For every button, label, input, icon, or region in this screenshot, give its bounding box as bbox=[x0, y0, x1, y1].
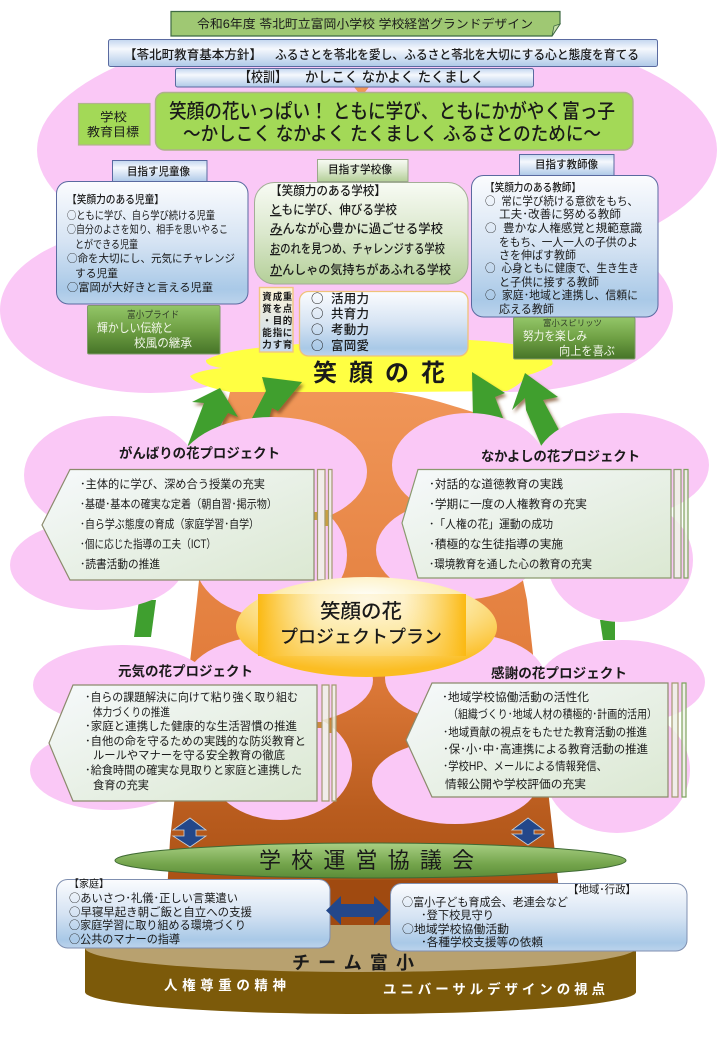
tab: ideal school bbox=[318, 160, 408, 182]
panel: ideal pupil: する児童 bbox=[75, 267, 118, 280]
petals: がんばり flower bbox=[10, 416, 367, 617]
label: key competencies: 質 bbox=[262, 303, 272, 315]
yellow flower: smile flower bbox=[190, 340, 553, 392]
panel: home: 【家庭】 bbox=[69, 877, 109, 890]
project box: genki: ･自らの課題解決に向けて粘り強く取り組む bbox=[85, 690, 298, 704]
panel: ideal teacher: をもち、一人一人の子供のよ bbox=[499, 235, 638, 249]
panel: Tomioka spirit bbox=[514, 318, 635, 359]
panel: community and administration: ･各種学校支援等の依頼 bbox=[421, 935, 544, 949]
project box: kansha: ･地域学校協働活動の活性化 bbox=[442, 690, 590, 704]
project box: ganbari: ･主体的に学び、深め合う授業の充実 bbox=[80, 477, 265, 491]
panel: ideal school bbox=[254, 182, 468, 284]
project box: nakayoshi: ･学期に一度の人権教育の充実 bbox=[429, 497, 587, 511]
panel: competencies list bbox=[300, 288, 468, 356]
school motto bar: 【校訓】 bbox=[239, 69, 287, 85]
school goal label bbox=[78, 104, 150, 145]
panel: ideal pupil: 【笑顔力のある児童】 bbox=[67, 192, 164, 206]
school goal main box: ～かしこく なかよく たくましく ふるさとのために～ bbox=[183, 123, 601, 145]
project box: ganbari bbox=[42, 470, 332, 580]
title banner bbox=[171, 12, 560, 36]
panel: ideal pupil bbox=[56, 182, 248, 304]
panel: Tomioka spirit: 努力を楽しみ bbox=[523, 328, 587, 343]
panel: ideal pupil: ○自分のよさを知り、相手を思いやるこ bbox=[67, 221, 228, 237]
panel: Tomioka pride: 富小プライド bbox=[127, 309, 179, 321]
project box: kansha bbox=[406, 683, 686, 797]
panel: community and administration: ○地域学校協働活動 bbox=[402, 921, 509, 937]
heading: smile flower: 笑 顔 の 花 bbox=[313, 360, 445, 387]
flower crown: pink petals bbox=[0, 20, 717, 393]
centre plan ellipse: 笑顔の花 bbox=[320, 600, 402, 623]
panel: ideal school: おのれを見つめ、チャレンジする学校 bbox=[270, 241, 445, 256]
project box: genki: 食育の充実 bbox=[93, 779, 149, 792]
panel: ideal teacher: ○ 家庭･地域と連携し、信頼に bbox=[485, 287, 638, 303]
panel: ideal school: ともに学び、伸びる学校 bbox=[270, 202, 397, 217]
panel: ideal pupil: ○命を大切にし、元気にチャレンジ bbox=[67, 250, 235, 266]
label: key competencies: す bbox=[273, 340, 282, 351]
lower green arrow stems bbox=[134, 600, 615, 640]
centre plan ellipse: プロジェクトプラン bbox=[280, 627, 442, 647]
project box: kansha: （組織づくり･地域人材の積極的･計画的活用） bbox=[448, 707, 657, 721]
panel: Tomioka spirit: 向上を喜ぶ bbox=[559, 343, 615, 358]
panel: ideal teacher: と子供に接する教師 bbox=[499, 275, 599, 289]
green arrows rising to the flower bbox=[186, 372, 559, 450]
project box: genki: ･自他の命を守るための実践的な防災教育と bbox=[85, 734, 306, 748]
panel: Tomioka pride: 校風の継承 bbox=[134, 336, 192, 350]
town education policy bar bbox=[108, 40, 658, 66]
panel: ideal teacher bbox=[472, 176, 658, 317]
tree trunk bbox=[165, 392, 560, 930]
panel: ideal teacher: 工夫･改善に努める教師 bbox=[499, 207, 621, 221]
panel: competencies list: ○ bbox=[311, 303, 324, 322]
project box: kansha: ･保･小･中･高連携による教育活動の推進 bbox=[443, 742, 648, 756]
team base cylinder bbox=[85, 924, 636, 1014]
heading: ganbari project: がんばりの花プロジェクト bbox=[119, 445, 280, 461]
panel: ideal school: かんしゃの気持ちがあふれる学校 bbox=[270, 262, 451, 277]
tab: ideal teacher bbox=[520, 154, 614, 176]
label: key competencies: を bbox=[273, 304, 282, 315]
project box: ganbari: ･読書活動の推進 bbox=[80, 557, 160, 571]
tab: ideal pupil bbox=[112, 160, 207, 182]
project box: genki: ･家庭と連携した健康的な生活習慣の推進 bbox=[85, 719, 297, 733]
project box: genki bbox=[49, 685, 336, 801]
town education policy bar: 【苓北町教育基本方針】 bbox=[124, 47, 262, 62]
panel: ideal teacher: ○ 常に学び続ける意欲をもち、 bbox=[485, 193, 638, 209]
panel: Tomioka spirit: 富小スピリッツ bbox=[543, 318, 602, 328]
arrow: horizontal double bbox=[326, 896, 389, 925]
tab: ideal school: 目指す学校像 bbox=[328, 162, 392, 176]
panel: competencies list: 共育力 bbox=[331, 306, 369, 321]
project box: genki: 体力づくりの推進 bbox=[93, 705, 170, 719]
arrow: left vertical double bbox=[173, 818, 206, 847]
tab: ideal teacher: 目指す教師像 bbox=[535, 157, 598, 171]
school motto bar bbox=[176, 68, 534, 87]
heading: nakayoshi project: なかよしの花プロジェクト bbox=[481, 449, 640, 464]
title banner: 令和6年度 苓北町立富岡小学校 学校経営グランドデザイン bbox=[197, 16, 533, 31]
label: key competencies: 重 bbox=[283, 291, 293, 303]
panel: competencies list: ○ bbox=[311, 288, 324, 307]
project box: ganbari: ･個に応じた指導の工夫（ICT） bbox=[80, 537, 216, 551]
panel: community and administration: ･登下校見守り bbox=[421, 908, 494, 922]
petals: 感謝 flower bbox=[372, 634, 705, 833]
panel: home: ○早寝早起き朝ご飯と自立への支援 bbox=[69, 904, 252, 920]
label: key competencies: ・ bbox=[262, 316, 272, 327]
label: key competencies bbox=[260, 288, 293, 352]
tab: ideal pupil: 目指す児童像 bbox=[127, 164, 190, 178]
label: key competencies: 指 bbox=[273, 327, 283, 339]
school council oval: 学校運営協議会 bbox=[259, 848, 474, 873]
panel: ideal school: 【笑顔力のある学校】 bbox=[270, 183, 386, 198]
school goal label: 学校 bbox=[100, 109, 127, 124]
project box: ganbari: ･自ら学ぶ態度の育成（家庭学習･自学） bbox=[80, 517, 259, 531]
heading: kansha project: 感謝の花プロジェクト bbox=[491, 665, 627, 681]
panel: home: ○公共のマナーの指導 bbox=[69, 931, 180, 947]
school goal main box bbox=[156, 92, 633, 150]
school council oval bbox=[115, 843, 626, 878]
base text: universal design: ユニバーサルデザインの視点 bbox=[383, 981, 606, 997]
panel: Tomioka pride bbox=[88, 306, 220, 354]
trunk tip under motto bbox=[354, 87, 369, 92]
project box: nakayoshi: ･対話的な道徳教育の実践 bbox=[429, 477, 564, 491]
petals: 元気 flower bbox=[30, 635, 373, 820]
project box: kansha: ･学校HP、メールによる情報発信、 bbox=[443, 759, 607, 773]
project box: nakayoshi bbox=[402, 470, 688, 578]
school goal label: 教育目標 bbox=[87, 124, 139, 139]
panel: ideal school: みんなが心豊かに過ごせる学校 bbox=[270, 221, 443, 236]
panel: ideal pupil: ○ともに学び、自ら学び続ける児童 bbox=[67, 207, 215, 223]
label: key competencies: 力 bbox=[262, 339, 272, 351]
team heading: チーム富小 bbox=[292, 953, 414, 973]
base text: human rights: 人権尊重の精神 bbox=[164, 977, 286, 993]
panel: competencies list: 活用力 bbox=[331, 292, 369, 306]
panel: competencies list: 富岡愛 bbox=[331, 339, 369, 353]
label: key competencies: 成 bbox=[273, 291, 283, 303]
school motto bar: かしこく なかよく たくましく bbox=[305, 69, 484, 85]
label: key competencies: 資 bbox=[262, 291, 272, 303]
panel: competencies list: ○ bbox=[311, 335, 324, 354]
label: key competencies: 育 bbox=[283, 339, 292, 351]
centre plan ellipse bbox=[236, 577, 497, 677]
town education policy bar: ふるさとを苓北を愛し、ふるさと苓北を大切にする心と態度を育てる bbox=[275, 47, 639, 62]
panel: ideal pupil: とができる児童 bbox=[75, 237, 138, 251]
project box: genki: ルールやマナーを守る安全教育の徹底 bbox=[93, 748, 285, 762]
label: key competencies: に bbox=[283, 328, 292, 339]
panel: competencies list: 考動力 bbox=[331, 322, 369, 337]
school goal main box: 笑顔の花いっぱい！ ともに学び、ともにかがやく富っ子 bbox=[169, 100, 615, 123]
panel: community and administration bbox=[390, 882, 687, 951]
label: key competencies: 的 bbox=[283, 315, 292, 327]
panel: ideal teacher: 【笑顔力のある教師】 bbox=[485, 180, 581, 194]
panel: ideal teacher: ○ 心身ともに健康で、生き生き bbox=[485, 260, 639, 276]
panel: ideal teacher: ○ 豊かな人権感覚と規範意識 bbox=[485, 220, 643, 236]
panel: home: ○あいさつ･礼儀･正しい言葉遣い bbox=[69, 890, 238, 906]
project box: kansha: 情報公開や学校評価の充実 bbox=[445, 777, 586, 791]
project box: nakayoshi: ･「人権の花」運動の成功 bbox=[429, 517, 553, 531]
project box: genki: ･給食時間の確実な見取りと家庭と連携した bbox=[85, 763, 302, 777]
panel: ideal teacher: 応える教師 bbox=[499, 302, 554, 316]
panel: community and administration: 【地域･行政】 bbox=[568, 882, 636, 896]
panel: home bbox=[56, 877, 330, 948]
panel: Tomioka pride: 輝かしい伝統と bbox=[97, 321, 173, 335]
project box: kansha: ･地域貢献の視点をもたせた教育活動の推進 bbox=[443, 725, 647, 739]
arrow: right vertical double bbox=[512, 818, 544, 845]
petals: なかよし flower bbox=[376, 413, 709, 622]
project box: ganbari: ･基礎･基本の確実な定着（朝自習･掲示物） bbox=[80, 497, 277, 511]
panel: home: ○家庭学習に取り組める環境づくり bbox=[69, 917, 246, 933]
panel: ideal teacher: さを伸ばす教師 bbox=[499, 248, 576, 262]
panel: competencies list: ○ bbox=[311, 319, 324, 338]
panel: ideal pupil: ○富岡が大好きと言える児童 bbox=[67, 279, 213, 295]
trunk lower part over base bbox=[166, 880, 558, 925]
label: key competencies: 目 bbox=[273, 316, 282, 327]
heading: genki project: 元気の花プロジェクト bbox=[118, 663, 253, 679]
label: key competencies: 点 bbox=[283, 303, 293, 315]
panel: community and administration: ○富小子ども育成会、老連会など bbox=[402, 894, 568, 910]
label: key competencies: 能 bbox=[262, 327, 272, 339]
project box: nakayoshi: ･環境教育を通した心の教育の充実 bbox=[429, 557, 592, 571]
project box: nakayoshi: ･積極的な生徒指導の実施 bbox=[429, 537, 564, 551]
